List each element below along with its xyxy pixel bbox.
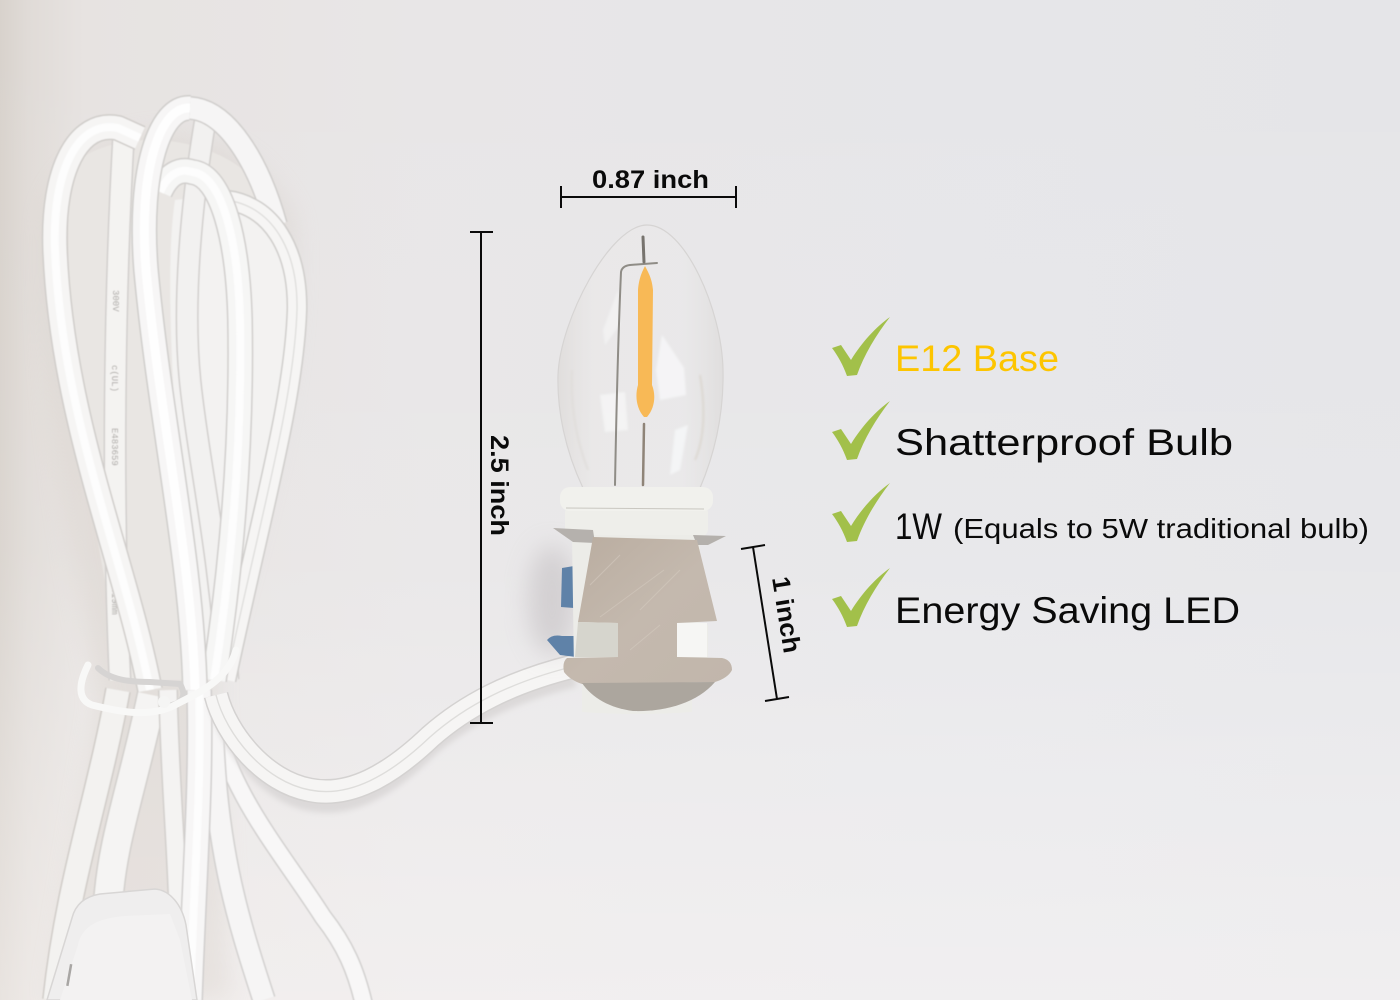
LED filament [636,266,654,417]
filament support wires [615,237,657,485]
metal bracket [553,528,732,711]
notch: right bright [677,623,707,657]
cord printing: 2X0.519mm [109,566,119,615]
feature: Shatterproof Bulb: Shatterproof Bulb [895,421,1233,463]
dimension: height 2.5 inch: 2.5 inch [485,435,513,536]
blue clip pieces [547,566,576,657]
feature: E12 Base [832,317,1059,379]
cord bundle [55,108,364,1000]
flat cords with print [115,122,228,680]
cord leading to bulb [216,666,575,806]
bulb fixture shadow [528,545,576,655]
icon: check mark [832,317,890,376]
cord tie [81,650,236,713]
feature: 1W [832,483,1369,547]
glass reflections [572,290,703,475]
dimension: base 1 inch [741,545,806,701]
bulb base collar [560,487,713,537]
cord printing: 300V [110,290,120,312]
cord printing: E483659 [109,428,119,466]
gap fill between loops [68,140,292,680]
cord printing: SPT-1W [109,518,119,551]
bulb glass [558,225,723,488]
loop cords [55,108,297,690]
dimension: base 1 inch: 1 inch [766,575,806,655]
icon: check mark [832,483,890,542]
feature: Shatterproof Bulb [832,401,1233,463]
cord printing: c(UL) [109,365,119,392]
dimension: width 0.87 inch: 0.87 inch [592,166,709,194]
shadow behind cord bundle [44,133,296,1000]
dimension: height 2.5 inch [470,232,513,723]
feature: 1W: 1W [895,505,943,547]
socket body [572,535,708,714]
dimension: width 0.87 inch [561,166,736,208]
feature: Energy Saving LED [832,568,1240,631]
feature: E12 Base: E12 Base [895,337,1059,379]
lower cords [55,690,364,1000]
brushed metal streaks [590,555,680,650]
inline switch [47,889,197,1000]
feature: Energy Saving LED: Energy Saving LED [895,589,1240,631]
icon: check mark [832,568,890,627]
notch: left shaded [575,622,618,657]
feature: 1W: (Equals to 5W traditional bulb) [953,513,1369,544]
cord printing [109,290,120,615]
icon: check mark [832,401,890,460]
